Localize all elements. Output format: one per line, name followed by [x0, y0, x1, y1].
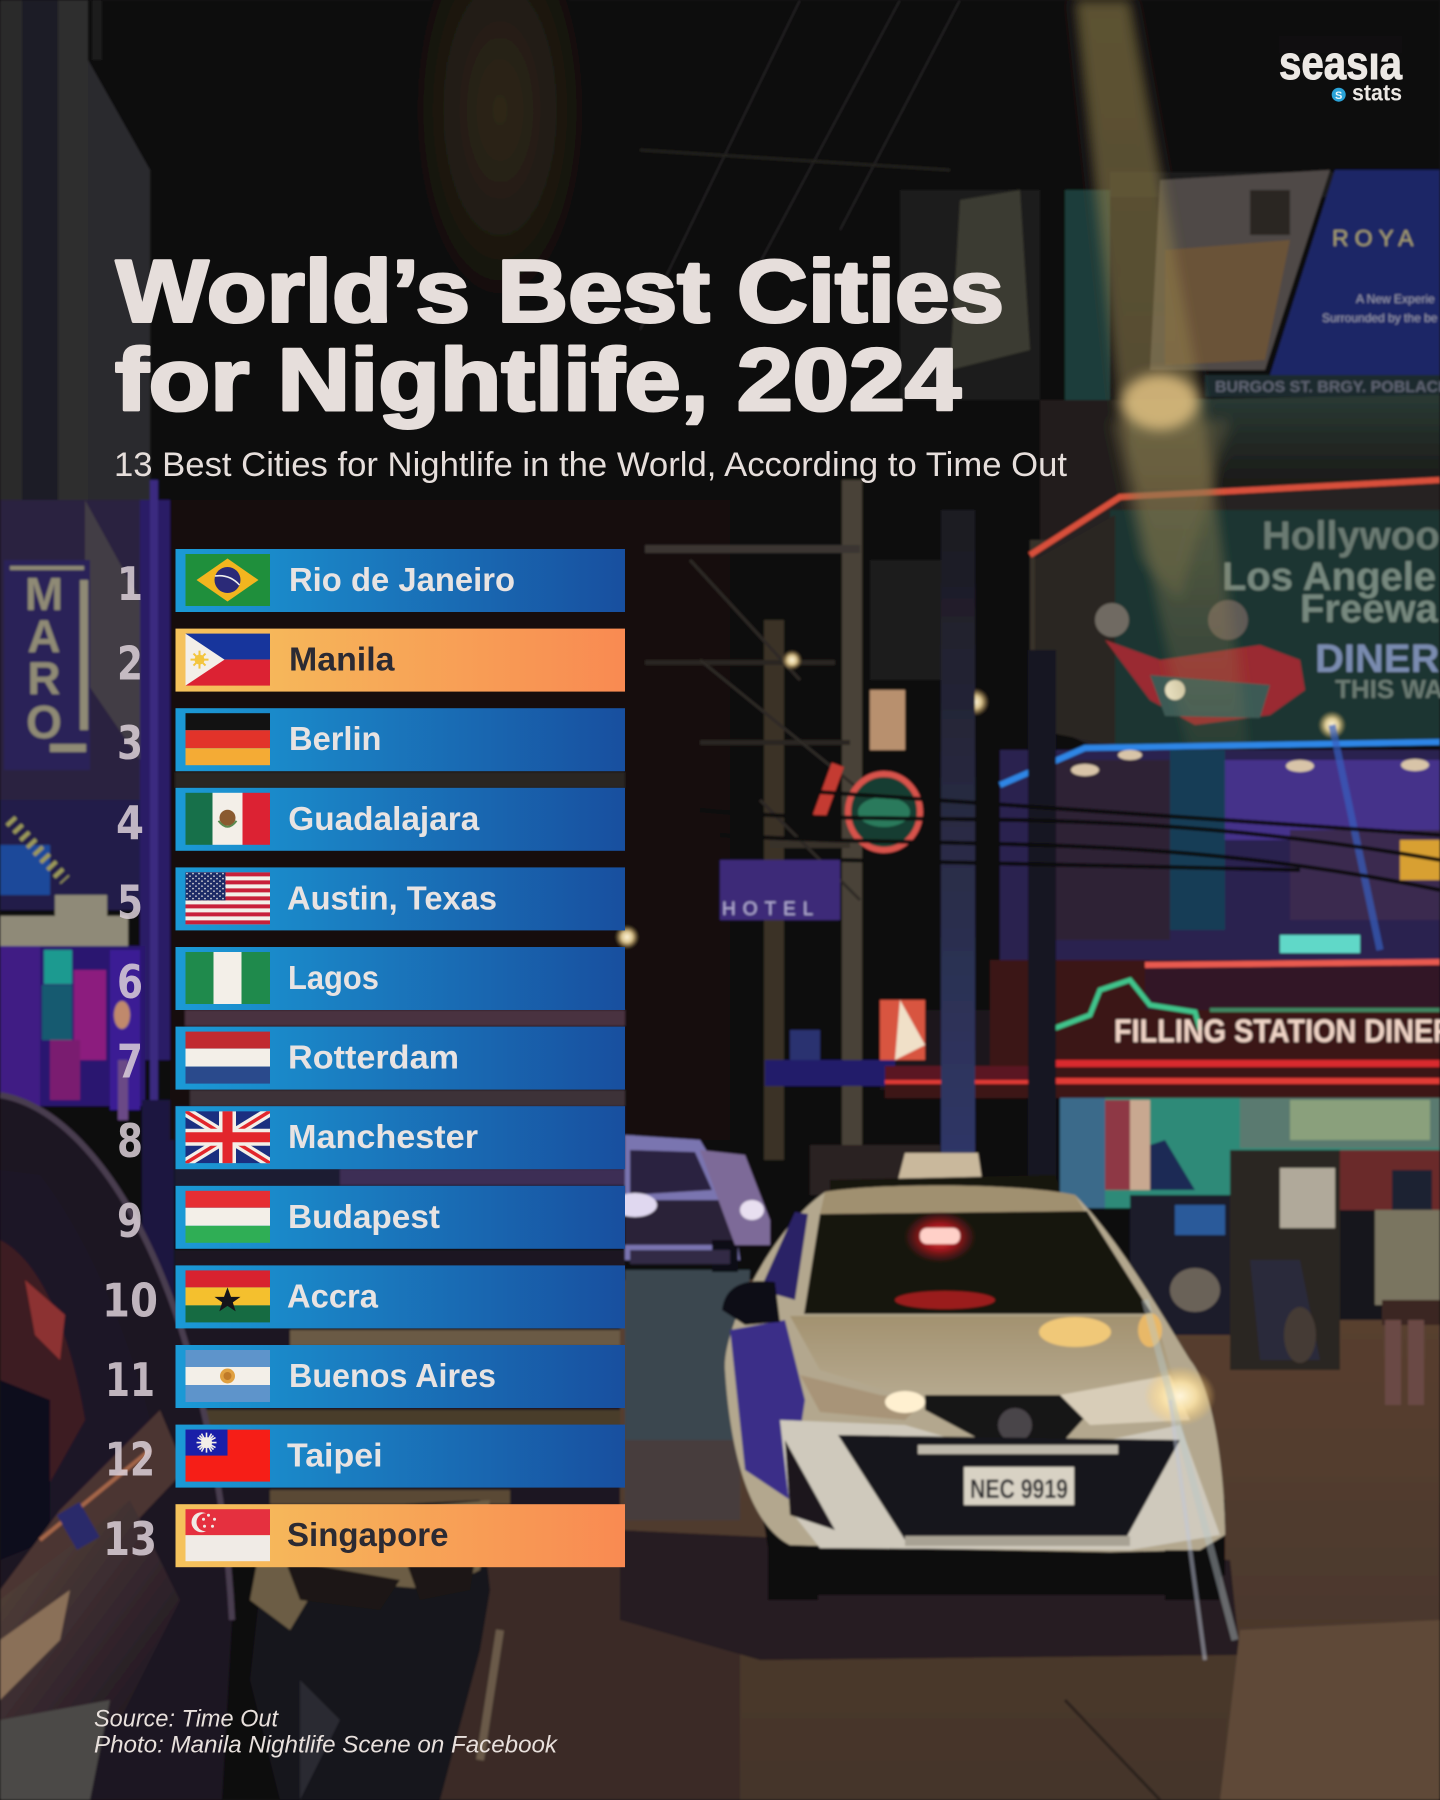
neon sign MARO: [4, 560, 90, 770]
source and photo credit: Photo: Manila Nightlife Scene on Facebook: [94, 1732, 559, 1758]
row 10: Accra: [102, 1265, 625, 1328]
row 5: Austin, Texas: 5: [117, 875, 143, 929]
neon round sign and hotel sign: [615, 688, 989, 1086]
row 13: Singapore: [103, 1504, 625, 1567]
Hollywood diner facade: DINER: [1315, 637, 1440, 681]
row 8: Manchester: [117, 1106, 625, 1169]
row 12: Taipei: 12: [105, 1433, 155, 1487]
light beam from street lamp: [1075, 0, 1255, 790]
row 11: Buenos Aires: [105, 1345, 625, 1408]
row 2: Manila: [117, 629, 625, 692]
flag: Philippines: [186, 634, 270, 686]
blue neon storefront: [1000, 711, 1440, 965]
row 6: Lagos: 6: [117, 955, 143, 1009]
row 7: Rotterdam: Rotterdam: [288, 1039, 459, 1076]
logo badge: S: [1335, 90, 1342, 102]
motorcycle: [250, 1500, 500, 1800]
row 12: Taipei: Taipei: [287, 1437, 382, 1474]
row 1: Rio de Janeiro: 1: [117, 557, 143, 611]
neon sign MARO: M: [25, 568, 63, 620]
row 3: Berlin: Berlin: [289, 720, 382, 757]
logo: seasia stats: [1279, 36, 1403, 106]
neon sign MARO: O: [26, 696, 62, 748]
logo: seasia stats: seasia: [1279, 36, 1403, 89]
flag: Nigeria: [186, 952, 270, 1004]
row 10: Accra: Accra: [287, 1277, 379, 1314]
row 9: Budapest: 9: [117, 1194, 143, 1248]
row 4: Guadalajara: 4: [116, 796, 144, 850]
row 1: Rio de Janeiro: Rio de Janeiro: [289, 561, 515, 598]
billboard: ROYA: [1332, 225, 1419, 251]
upper right buildings: [870, 190, 1140, 1090]
row 3: Berlin: [117, 708, 625, 771]
row 9: Budapest: [117, 1186, 625, 1249]
Hollywood diner facade: [1030, 476, 1440, 745]
row 7: Rotterdam: 7: [117, 1035, 143, 1089]
flag: Brazil: [186, 554, 270, 606]
flag: Netherlands: [186, 1032, 270, 1084]
subtitle: 13 Best Cities for Nightlife in the World, According to Time Out: [114, 446, 1068, 484]
title: for Nightlife, 2024: [115, 330, 961, 429]
title: World’s Best Cities: [116, 242, 1004, 340]
row 5: Austin, Texas: Austin, Texas: [287, 879, 497, 916]
left building facade: [0, 0, 170, 1100]
row 5: Austin, Texas: [117, 867, 625, 930]
billboard: A New Experie: [1356, 292, 1435, 306]
flag: United States: [186, 872, 270, 924]
row 13: Singapore: 13: [103, 1512, 157, 1566]
row 12: Taipei: [105, 1425, 625, 1488]
flag: Taiwan: [186, 1430, 270, 1482]
row 2: Manila: 2: [117, 637, 143, 691]
row 3: Berlin: 3: [117, 716, 143, 770]
row 11: Buenos Aires: 11: [105, 1353, 155, 1407]
taxi: NEC 9919: [970, 1474, 1068, 1504]
neon sign MARO: R: [27, 652, 61, 704]
teal shopfront: [810, 1098, 1440, 1210]
flag: United Kingdom: [186, 1111, 270, 1164]
row 4: Guadalajara: Guadalajara: [288, 800, 480, 837]
flag: Hungary: [186, 1191, 270, 1243]
row 11: Buenos Aires: Buenos Aires: [289, 1357, 496, 1394]
street poles in front of the shops: [700, 510, 1440, 1185]
logo: seasia stats: stats: [1352, 80, 1402, 106]
Filling Station Diner neon sign: [885, 960, 1440, 1098]
red car sculpture: [1095, 600, 1305, 725]
billboard: [1110, 170, 1440, 490]
flag: Ghana: [186, 1270, 270, 1322]
row 8: Manchester: Manchester: [288, 1118, 478, 1155]
row 10: Accra: 10: [102, 1273, 158, 1327]
row 4: Guadalajara: [116, 788, 625, 851]
Hollywood diner facade: Hollywoo: [1262, 514, 1440, 558]
row 8: Manchester: 8: [117, 1114, 143, 1168]
pedestrians at right: [1375, 1170, 1440, 1405]
source and photo credit: Source: Time Out: [94, 1706, 279, 1732]
taxi: [722, 1153, 1235, 1660]
row 6: Lagos: [117, 947, 625, 1010]
left shopfront neon: [0, 820, 174, 1300]
flag: Mexico: [186, 793, 270, 845]
utility poles and wires: [640, 0, 960, 1160]
middle dark alley behind the list: [170, 500, 730, 1510]
source and photo credit: [94, 1706, 559, 1758]
row 2: Manila: Manila: [289, 641, 395, 678]
flag: Germany: [186, 713, 270, 765]
ranking list: [102, 549, 625, 1567]
Hollywood diner facade: Freewa: [1300, 587, 1439, 631]
neon sign MARO: A: [27, 610, 61, 662]
row 1: Rio de Janeiro: [117, 549, 625, 612]
row 7: Rotterdam: [117, 1027, 625, 1090]
flag: Singapore: [186, 1509, 270, 1561]
neon round sign and hotel sign: HOTEL: [722, 899, 820, 920]
flag: Argentina: [186, 1350, 270, 1402]
faint upper light beam: [415, 0, 585, 300]
row 9: Budapest: Budapest: [288, 1198, 440, 1235]
row 6: Lagos: Lagos: [288, 959, 379, 996]
street surface: [440, 1270, 1440, 1800]
tricycle and motorbike: [1130, 1150, 1400, 1370]
billboard: Surrounded by the be: [1322, 311, 1438, 325]
car on the left: [0, 1095, 232, 1800]
white SUV behind the taxi: [613, 1135, 770, 1272]
Hollywood diner facade: Los Angele: [1222, 555, 1436, 599]
row 13: Singapore: Singapore: [287, 1516, 448, 1553]
title: [115, 242, 1004, 429]
